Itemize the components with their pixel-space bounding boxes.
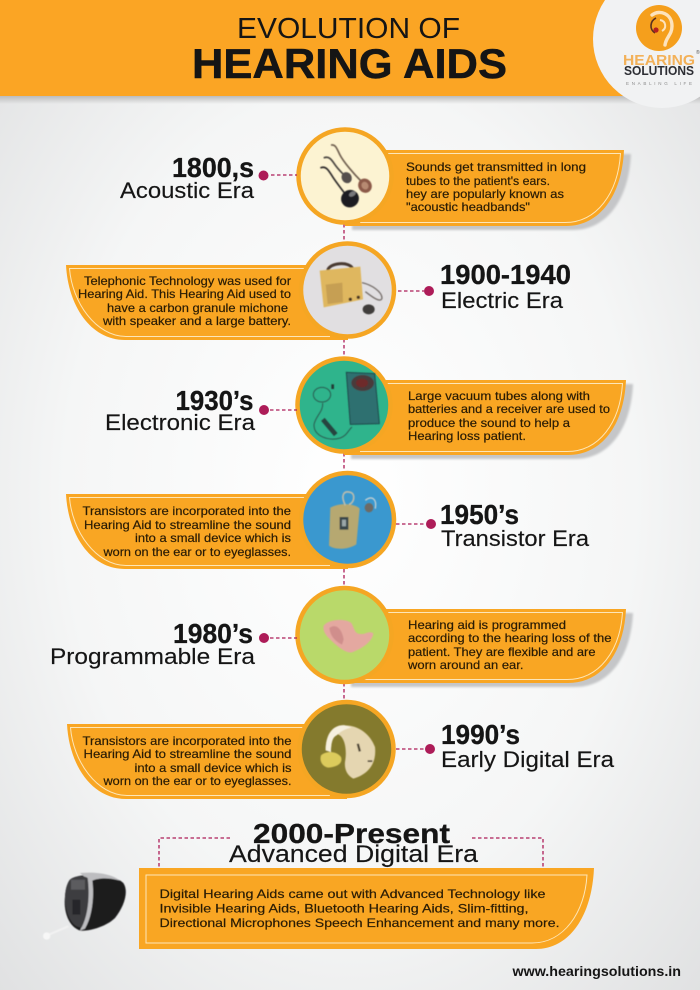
marker dot — [259, 633, 297, 643]
title — [192, 13, 507, 87]
logo: Hearing Solutions: ® — [696, 49, 700, 56]
card: advanced digital description — [139, 868, 594, 949]
card: advanced digital description: Directional Microphones Speech Enhancement and many more. — [160, 916, 560, 930]
card: early digital description: Hearing Aid to streamline the sound — [84, 748, 292, 761]
title: EVOLUTION OF — [237, 13, 460, 45]
heading: 1990s: Early Digital Era — [441, 747, 615, 772]
marker dot — [396, 744, 435, 754]
heading: 1930s: 1930’s — [176, 385, 254, 416]
card: electronic description: produce the sound to help a — [408, 417, 571, 430]
heading: 1900-1940: 1900-1940 — [440, 259, 571, 290]
heading: 2000-present: 2000-Present — [253, 818, 450, 849]
website url: www.hearingsolutions.in — [511, 964, 681, 979]
card: early digital description — [67, 724, 347, 799]
card: early digital description: worn on the ear or to eyeglasses. — [102, 775, 292, 788]
timeline connector — [343, 224, 345, 700]
card: electronic description: Hearing loss patient. — [408, 430, 526, 443]
marker dot — [259, 405, 297, 415]
card: acoustic description — [345, 150, 631, 230]
era 5: 1980s programmable — [50, 588, 633, 687]
bracket connector — [159, 838, 543, 868]
marker dot — [396, 519, 436, 529]
heading: 1990s — [441, 719, 615, 772]
logo: Hearing Solutions — [593, 0, 700, 108]
photo: acoustic headbands — [298, 130, 392, 222]
header banner — [0, 0, 700, 104]
card: acoustic description: tubes to the patient's ears. — [406, 175, 550, 188]
heading: 1980s: 1980’s — [173, 618, 253, 649]
card: acoustic description: "acoustic headbands" — [406, 201, 530, 214]
card: electronic description: batteries and a receiver are used to — [408, 403, 610, 416]
card: electric description: Hearing Aid. This Hearing Aid used to — [78, 288, 291, 301]
era 3: 1930s electronic — [105, 358, 633, 459]
heading: 1950s: Transistor Era — [441, 526, 590, 551]
card: programmable description: Hearing aid is programmed — [408, 619, 566, 632]
era 7: 2000-present advanced digital — [43, 818, 594, 949]
photo: in-ear programmable aid — [298, 588, 392, 682]
card: transistor description: into a small device which is — [135, 532, 291, 545]
card: electronic description — [344, 380, 633, 459]
logo: Hearing Solutions: ENABLING LIFE — [626, 81, 692, 86]
heading: 1900-1940: Electric Era — [441, 288, 564, 313]
heading: 1980s: Programmable Era — [50, 644, 256, 669]
card: early digital description: Transistors are incorporated into the — [82, 735, 292, 748]
card: programmable description: according to the hearing loss of the — [408, 632, 612, 645]
era 1: 1800s acoustic — [120, 130, 631, 230]
card: transistor description: Hearing Aid to streamline the sound — [84, 519, 291, 532]
logo: Hearing Solutions: SOLUTIONS — [624, 63, 694, 78]
card: advanced digital description: Invisible Hearing Aids, Bluetooth Hearing Aids, Slim-fitting, — [160, 902, 528, 916]
card: electric description: with speaker and a large battery. — [102, 315, 291, 328]
card: transistor description — [66, 494, 348, 569]
card: electric description: Telephonic Technology was used for — [84, 275, 291, 288]
heading: 1800s — [120, 152, 255, 203]
heading: 1950s: 1950’s — [440, 499, 519, 530]
heading: 1990s: 1990’s — [441, 719, 520, 750]
heading: 1950s — [440, 499, 590, 551]
heading: 1800s: Acoustic Era — [120, 178, 255, 203]
logo: Hearing Solutions: HEARING — [623, 52, 695, 69]
card: transistor description: Transistors are incorporated into the — [82, 505, 291, 518]
heading: 1900-1940 — [440, 259, 571, 313]
photo: vacuum tube device — [298, 358, 390, 452]
card: electric description — [66, 265, 348, 340]
era 6: 1990s early digital — [67, 702, 615, 799]
card: acoustic description: hey are popularly known as — [406, 188, 564, 201]
marker dot — [398, 286, 434, 296]
card: electronic description: Large vacuum tubes along with — [408, 390, 590, 403]
marker dot — [258, 170, 297, 180]
card: acoustic description: Sounds get transmitted in long — [406, 161, 586, 174]
title: HEARING AIDS — [192, 40, 507, 87]
photo: battery box device — [301, 244, 394, 336]
photo: transistor device — [301, 473, 394, 566]
heading: 1980s — [50, 618, 256, 669]
card: transistor description: worn on the ear or to eyeglasses. — [102, 546, 291, 559]
card: programmable description — [344, 609, 633, 687]
heading: 2000-present — [229, 818, 479, 868]
card: programmable description: patient. They are flexible and are — [408, 646, 596, 659]
heading: 1800s: 1800,s — [172, 152, 254, 183]
card: programmable description: worn around an ear. — [407, 659, 524, 672]
photo: behind-the-ear aid — [300, 702, 394, 796]
era 4: 1950s transistor — [66, 473, 590, 569]
heading: 1930s: Electronic Era — [105, 410, 256, 435]
icon: invisible hearing aid — [43, 873, 126, 940]
era 2: 1900-1940 electric — [66, 244, 571, 340]
card: early digital description: into a small device which is — [134, 762, 292, 775]
heading: 2000-present: Advanced Digital Era — [229, 841, 479, 868]
card: advanced digital description: Digital Hearing Aids came out with Advanced Technology like — [160, 887, 546, 901]
heading: 1930s — [105, 385, 256, 435]
card: electric description: have a carbon granule michone — [107, 302, 288, 315]
